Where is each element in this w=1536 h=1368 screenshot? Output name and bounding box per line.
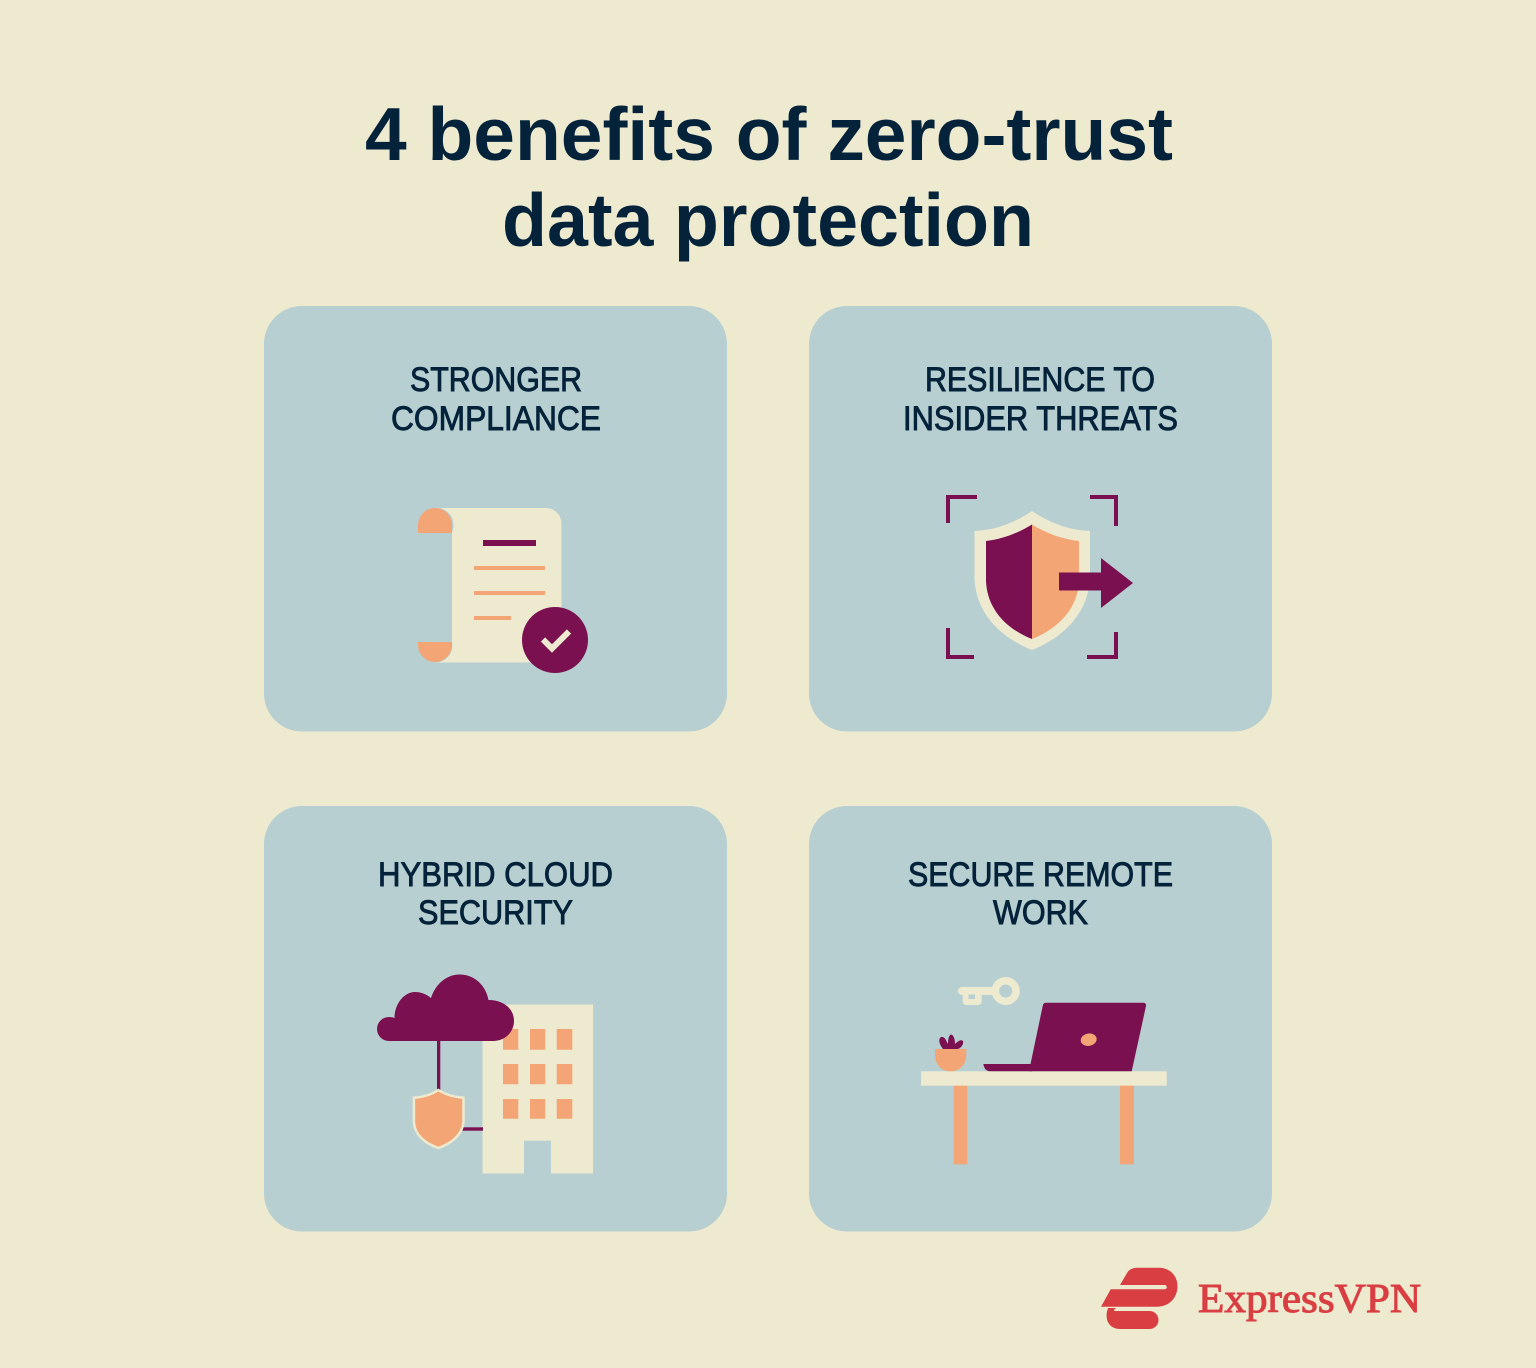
heading: stronger compliance — [391, 361, 601, 438]
heading: hybrid cloud security: HYBRID CLOUD — [378, 856, 613, 894]
heading: hybrid cloud security — [378, 856, 613, 932]
heading: resilience to insider threats: INSIDER THREATS — [903, 400, 1178, 438]
icon: ExpressVPN mark — [1101, 1268, 1178, 1329]
icon: cloud, shield and office building — [377, 974, 593, 1174]
icon: desk with laptop, plant and key — [921, 981, 1167, 1164]
heading: hybrid cloud security: SECURITY — [418, 894, 573, 932]
wordmark: ExpressVPN — [1198, 1275, 1421, 1321]
title: data protection — [502, 178, 1034, 262]
heading: resilience to insider threats: RESILIENCE TO — [925, 361, 1155, 399]
panel: stronger compliance — [264, 306, 727, 732]
title — [365, 92, 1173, 262]
title: 4 benefits of zero-trust — [365, 92, 1173, 176]
heading: resilience to insider threats — [903, 361, 1178, 438]
icon: shield with exit arrow in brackets — [948, 497, 1133, 657]
panel: hybrid cloud security — [264, 806, 727, 1232]
logo: ExpressVPN — [1101, 1268, 1421, 1329]
heading: secure remote work: SECURE REMOTE — [908, 856, 1173, 894]
panel: secure remote work — [809, 806, 1272, 1232]
panel: resilience to insider threats — [809, 306, 1272, 732]
heading: secure remote work: WORK — [993, 894, 1088, 932]
heading: stronger compliance: COMPLIANCE — [391, 400, 601, 438]
icon: document scroll with check badge — [418, 508, 588, 673]
heading: secure remote work — [908, 856, 1173, 932]
heading: stronger compliance: STRONGER — [410, 361, 582, 399]
